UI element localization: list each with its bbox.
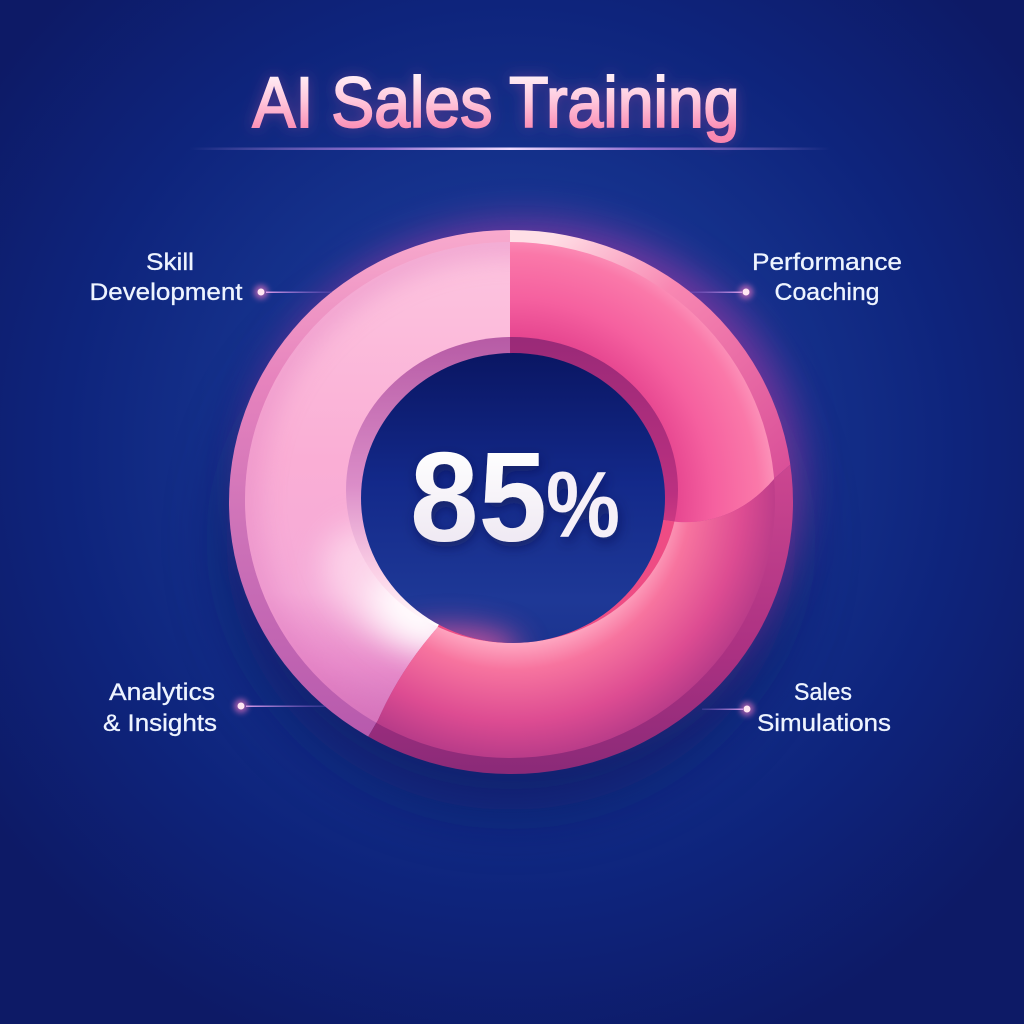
label: analytics and insights xyxy=(103,679,326,737)
label: skill development xyxy=(90,249,332,306)
label: performance coaching xyxy=(690,249,902,306)
ring shadow xyxy=(226,270,796,810)
inner lip: right xyxy=(510,337,678,522)
label: skill development: Development xyxy=(90,279,243,306)
segment: sales simulations xyxy=(376,479,774,758)
inner lip: bottom xyxy=(438,520,674,643)
title: AI Sales Training xyxy=(252,64,740,143)
segment: performance coaching xyxy=(510,242,774,522)
center hole xyxy=(361,353,665,643)
rim: sales simulations xyxy=(368,464,793,774)
label: analytics and insights: & Insights xyxy=(103,710,217,737)
hole glow xyxy=(414,604,536,643)
donut chart xyxy=(226,222,801,810)
label: sales simulations: Simulations xyxy=(757,710,891,737)
center value: % xyxy=(546,452,620,557)
label: sales simulations: Sales xyxy=(794,679,852,706)
inner lip: left xyxy=(346,337,510,627)
rim: performance coaching xyxy=(510,230,790,522)
label: performance coaching: Performance xyxy=(752,249,902,276)
ring glow xyxy=(249,222,801,738)
rim: skill development xyxy=(229,230,510,736)
title underline xyxy=(190,148,830,150)
label: skill development: Skill xyxy=(146,249,194,276)
center value xyxy=(410,426,620,568)
label: sales simulations xyxy=(702,679,891,737)
label: performance coaching: Coaching xyxy=(774,279,880,306)
center value: 85 xyxy=(410,426,547,568)
segment: skill development xyxy=(245,242,510,723)
label: analytics and insights: Analytics xyxy=(109,679,215,706)
